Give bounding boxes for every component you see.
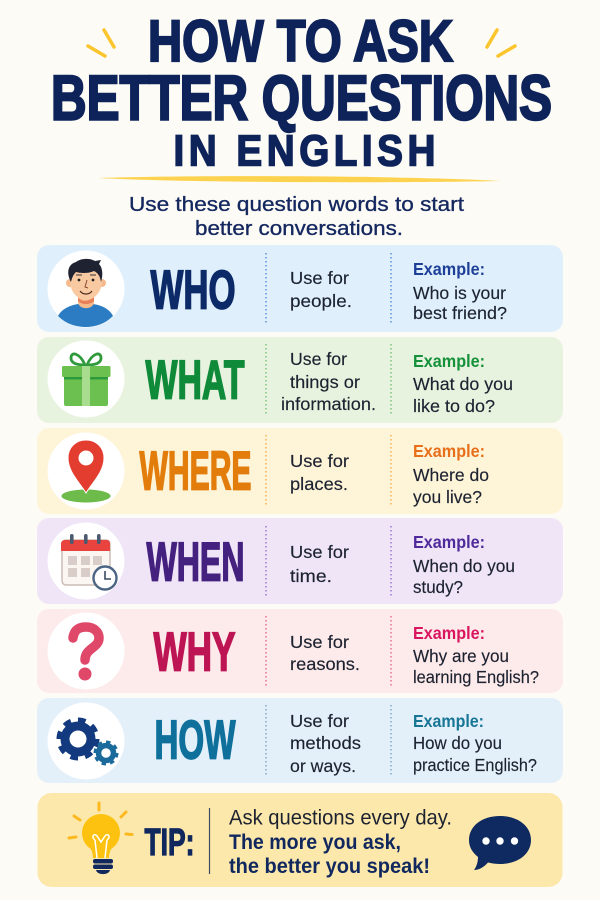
example: who: best friend? xyxy=(413,303,507,323)
subtitle xyxy=(129,193,464,240)
panel: why xyxy=(37,609,563,693)
use text: how: or ways. xyxy=(290,756,356,776)
example: how xyxy=(413,711,537,775)
word: where: WHERE xyxy=(140,440,252,502)
icon: light bulb xyxy=(69,803,132,874)
example: what: like to do? xyxy=(413,396,495,416)
tip text: The more you ask, xyxy=(229,831,401,854)
use text: why: reasons. xyxy=(290,654,360,674)
example: why: Why are you xyxy=(413,646,509,666)
example: when: study? xyxy=(413,577,463,597)
example: what: Example: xyxy=(413,351,485,371)
icon: location pin xyxy=(62,440,110,502)
icon: person xyxy=(58,259,113,327)
example: what xyxy=(413,351,513,416)
title: IN ENGLISH xyxy=(174,125,440,175)
tip text: the better you speak! xyxy=(229,855,430,878)
example: how: How do you xyxy=(413,733,502,753)
example: where: you live? xyxy=(413,487,482,507)
icon: right sparkle rays xyxy=(487,30,515,56)
use text: what: things or xyxy=(290,372,360,392)
use text: when: time. xyxy=(290,566,332,586)
title xyxy=(51,9,552,175)
use text: who: people. xyxy=(290,291,352,311)
tip text xyxy=(229,806,452,878)
example: why xyxy=(413,623,539,687)
panel: tip xyxy=(38,793,562,887)
example: how: practice English? xyxy=(413,755,537,775)
panel: where xyxy=(37,428,563,514)
use text: where: places. xyxy=(290,474,348,494)
example: when: When do you xyxy=(413,556,515,576)
use text: what: information. xyxy=(281,394,376,414)
subtitle: better conversations. xyxy=(195,217,403,240)
word: when: WHEN xyxy=(146,530,244,592)
word: who: WHO xyxy=(150,258,236,320)
panel: when xyxy=(37,518,563,604)
icon: gift xyxy=(62,354,110,406)
example: where xyxy=(413,441,489,507)
use text: how: methods xyxy=(290,733,361,753)
example: when: Example: xyxy=(413,532,485,552)
use text: what xyxy=(281,349,376,414)
icon: speech bubble xyxy=(469,816,531,870)
example: when xyxy=(413,532,515,597)
icon: gears xyxy=(60,720,116,764)
use text: how xyxy=(290,711,361,776)
use text: who: Use for xyxy=(290,268,349,288)
example: who: Example: xyxy=(413,259,485,279)
example: where: Where do xyxy=(413,465,489,485)
example: what: What do you xyxy=(413,374,513,394)
use text: when: Use for xyxy=(290,542,349,562)
use text: when xyxy=(290,542,349,586)
use text: why: Use for xyxy=(290,632,349,652)
panel: what xyxy=(37,337,563,423)
example: where: Example: xyxy=(413,441,485,461)
icon: left sparkle rays xyxy=(88,30,114,56)
icon: calendar and clock xyxy=(61,534,116,590)
use text: why xyxy=(290,632,360,674)
title: HOW TO ASK xyxy=(148,9,453,74)
title underline xyxy=(98,176,501,182)
tip text: Ask questions every day. xyxy=(229,806,452,830)
use text: what: Use for xyxy=(290,349,347,369)
panel: who xyxy=(37,245,563,332)
word: how: HOW xyxy=(154,708,236,770)
use text: where: Use for xyxy=(290,451,349,471)
icon: question mark xyxy=(73,627,99,680)
word: why: WHY xyxy=(154,620,236,682)
subtitle: Use these question words to start xyxy=(129,193,464,216)
example: who: Who is your xyxy=(413,283,506,303)
panel: how xyxy=(37,698,563,783)
use text: how: Use for xyxy=(290,711,349,731)
use text: where xyxy=(290,451,349,494)
example: how: Example: xyxy=(413,711,484,731)
tip label: TIP: xyxy=(144,822,194,864)
word: what: WHAT xyxy=(146,348,244,410)
use text: who xyxy=(290,268,352,311)
example: who xyxy=(413,259,507,323)
example: why: Example: xyxy=(413,623,485,643)
example: why: learning English? xyxy=(413,667,539,687)
